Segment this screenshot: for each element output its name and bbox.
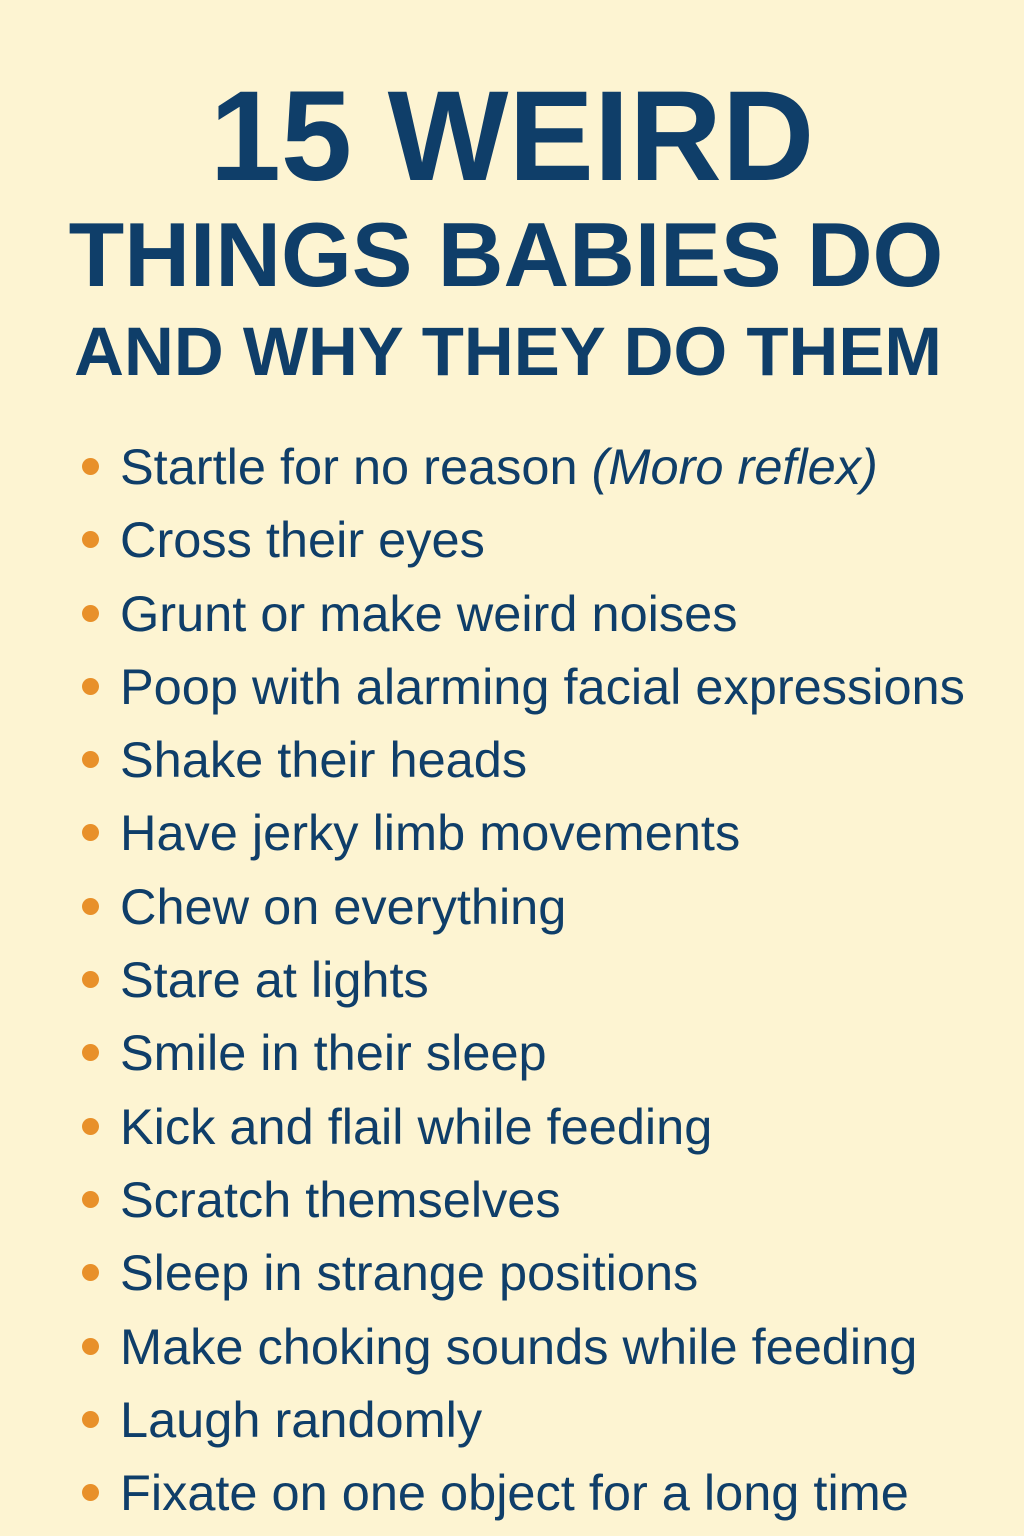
list of weird things: Kick and flail while feeding: [120, 1098, 712, 1155]
list of weird things: Scratch themselves: [120, 1171, 561, 1228]
list of weird things: Laugh randomly: [120, 1391, 482, 1448]
list of weird things: Smile in their sleep: [120, 1024, 547, 1081]
title line 1: 15 WEIRD: [210, 65, 814, 208]
title: [69, 65, 943, 390]
list of weird things: Make choking sounds while feeding: [120, 1318, 917, 1375]
list of weird things: Sleep in strange positions: [120, 1244, 698, 1301]
list of weird things: Poop with alarming facial expressions: [120, 658, 965, 715]
list of weird things: [82, 438, 965, 1521]
list of weird things: Stare at lights: [120, 951, 429, 1008]
list of weird things: Startle for no reason (Moro reflex): [120, 438, 878, 495]
list of weird things: Have jerky limb movements: [120, 804, 740, 861]
title line 2: THINGS BABIES DO: [69, 205, 943, 306]
list of weird things: Shake their heads: [120, 731, 527, 788]
list of weird things: Chew on everything: [120, 878, 566, 935]
title line 3: AND WHY THEY DO THEM: [74, 313, 942, 390]
list of weird things: Cross their eyes: [120, 511, 485, 568]
list of weird things: Fixate on one object for a long time: [120, 1464, 909, 1521]
list of weird things: Grunt or make weird noises: [120, 585, 737, 642]
